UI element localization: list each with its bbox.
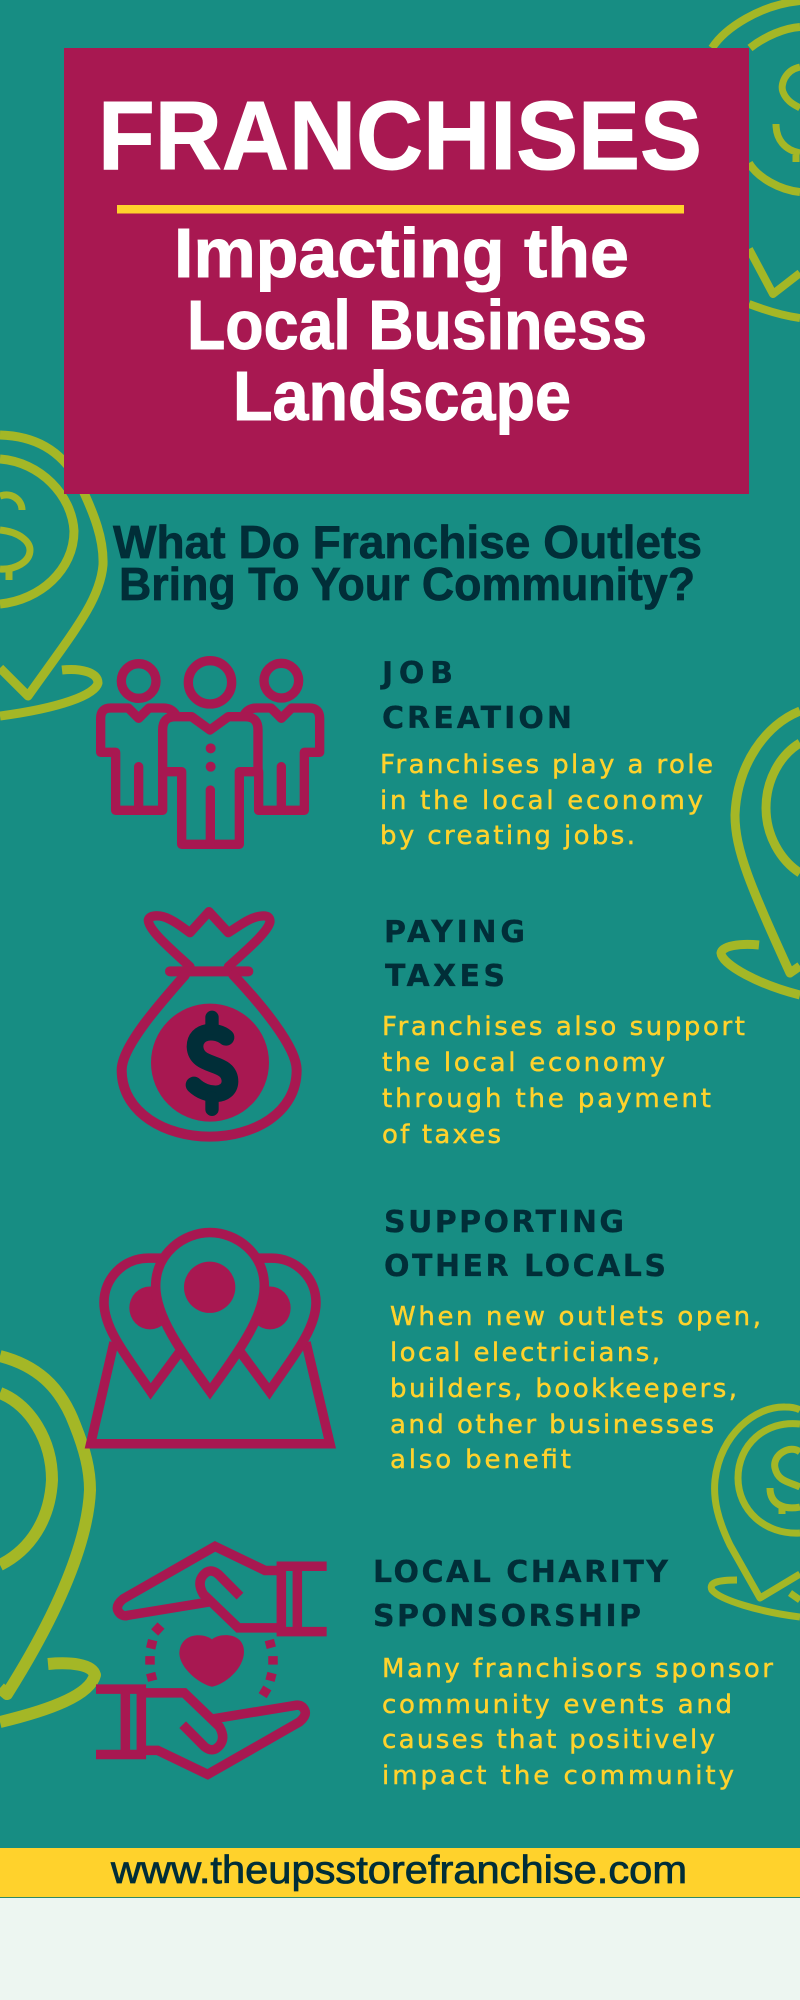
section heading: Bring To Your Community?	[119, 558, 695, 610]
text: supporting other locals: local electricians,	[390, 1338, 660, 1368]
section heading	[113, 516, 702, 610]
text: paying taxes: of taxes	[382, 1120, 501, 1150]
subtitle: Landscape	[233, 357, 571, 435]
text: supporting other locals: and other businesses	[390, 1410, 714, 1440]
icon: money bag	[122, 912, 297, 1137]
icon: map with location pins	[91, 1233, 330, 1444]
heading: paying taxes	[384, 915, 525, 994]
yellow rule	[117, 205, 684, 214]
heading: job creation: JOB	[380, 656, 453, 691]
text: local charity sponsorship: impact the community	[382, 1761, 734, 1791]
text: paying taxes: Franchises also support	[382, 1012, 745, 1042]
heading: supporting other locals: OTHER LOCALS	[384, 1249, 666, 1284]
icon: three people	[101, 661, 320, 844]
text: local charity sponsorship: community events and	[382, 1690, 732, 1720]
footer banner: website	[0, 1848, 800, 1898]
footer background: pale strip	[0, 1897, 800, 2000]
heading: local charity sponsorship: SPONSORSHIP	[373, 1599, 641, 1634]
heading: supporting other locals: SUPPORTING	[384, 1205, 624, 1240]
block: local charity sponsorship	[373, 1555, 773, 1791]
heading: job creation: CREATION	[382, 701, 572, 736]
text: job creation: by creating jobs.	[380, 821, 635, 851]
text: job creation: Franchises play a role	[380, 750, 713, 780]
decorative pin: right middle	[721, 711, 800, 995]
text: local charity sponsorship: Many franchisors sponsor	[382, 1654, 773, 1684]
heading: supporting other locals	[384, 1205, 666, 1284]
icon: hands protecting heart	[96, 1546, 327, 1774]
text: paying taxes: the local economy	[382, 1048, 665, 1078]
subtitle: Impacting the	[174, 214, 629, 292]
text: local charity sponsorship: causes that positively	[382, 1725, 715, 1755]
decorative pin: upper left	[0, 435, 103, 716]
decorative pin: lower left	[0, 1356, 95, 1722]
section heading: What Do Franchise Outlets	[113, 516, 702, 568]
heading: local charity sponsorship	[373, 1555, 669, 1634]
block: paying taxes	[382, 915, 745, 1150]
heading: job creation	[380, 656, 572, 736]
block: supporting other locals	[384, 1205, 761, 1475]
text: supporting other locals	[390, 1302, 761, 1475]
block: job creation	[380, 656, 713, 851]
text: paying taxes: through the payment	[382, 1084, 711, 1114]
text: job creation: in the local economy	[380, 786, 703, 816]
title: FRANCHISES	[98, 81, 702, 190]
text: supporting other locals: also benefit	[390, 1445, 571, 1475]
subtitle	[174, 214, 647, 435]
text: paying taxes	[382, 1012, 745, 1150]
decorative pin: lower right	[711, 1407, 800, 1617]
website url: www.theupsstorefranchise.com	[110, 1849, 687, 1892]
heading: local charity sponsorship: LOCAL CHARITY	[373, 1555, 669, 1590]
decorative pin: top right	[712, 1, 800, 318]
text: supporting other locals: builders, bookkeepers,	[390, 1374, 737, 1404]
subtitle: Local Business	[187, 286, 647, 364]
heading: paying taxes: PAYING	[384, 915, 525, 950]
text: supporting other locals: When new outlets open,	[390, 1302, 761, 1332]
heading: paying taxes: TAXES	[385, 959, 505, 994]
text: local charity sponsorship	[382, 1654, 773, 1791]
text: job creation	[380, 750, 713, 851]
panel: title banner	[64, 48, 749, 494]
